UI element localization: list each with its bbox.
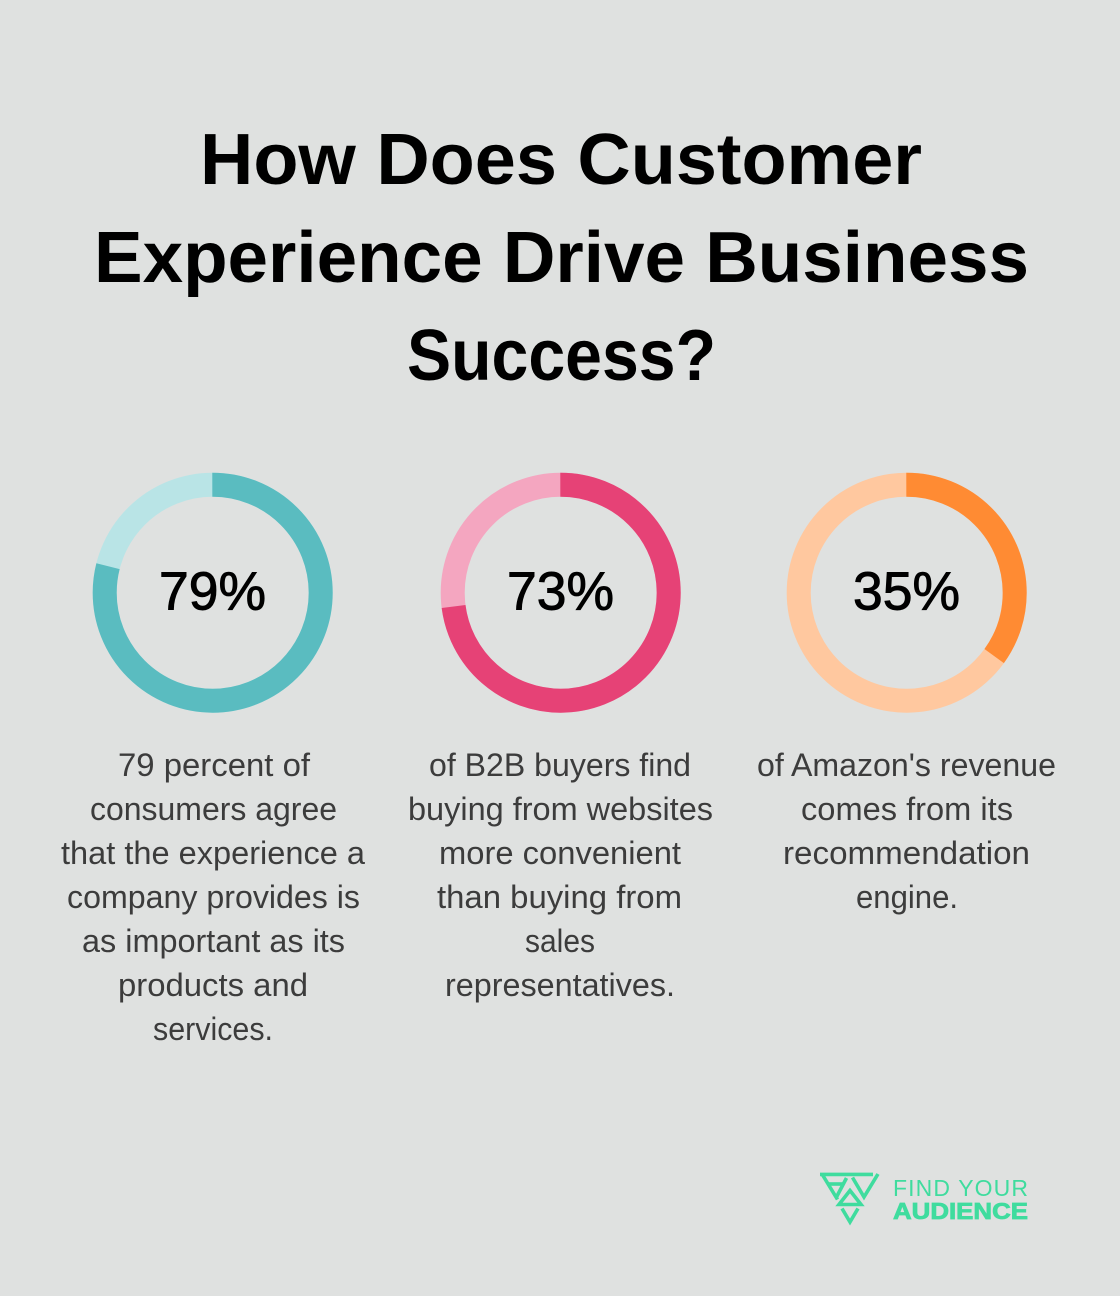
title xyxy=(94,120,1029,396)
donut chart: 79% xyxy=(105,485,321,701)
description: 35 percent: of Amazon's revenue xyxy=(757,747,1056,783)
description: 79 percent: services. xyxy=(153,1011,273,1047)
value: 79%: 79% xyxy=(159,562,266,622)
description: 35 percent: engine. xyxy=(856,879,958,915)
title: How Does Customer xyxy=(200,120,922,200)
description: 79 percent: products and xyxy=(118,967,308,1003)
description: 73 percent: of B2B buyers find xyxy=(429,747,691,783)
title: Success? xyxy=(407,316,716,396)
wordmark: AUDIENCE xyxy=(893,1198,1028,1224)
description: 79 percent: company provides is xyxy=(67,879,360,915)
wordmark xyxy=(893,1175,1028,1224)
description: 73 percent: than buying from xyxy=(437,879,682,915)
description: 73 percent: representatives. xyxy=(445,967,675,1003)
description: 73 percent: more convenient xyxy=(439,835,681,871)
description: 35 percent xyxy=(757,747,1056,915)
description: 73 percent: sales xyxy=(525,923,595,959)
wordmark: FIND YOUR xyxy=(893,1175,1028,1201)
description: 79 percent: consumers agree xyxy=(90,791,337,827)
panel: 79 percent stat xyxy=(61,485,365,1047)
description: 35 percent: recommendation xyxy=(783,835,1030,871)
panel: 35 percent stat xyxy=(757,485,1056,915)
panel: 73 percent stat xyxy=(408,485,713,1003)
description: 79 percent: 79 percent of xyxy=(118,747,310,783)
description: 35 percent: comes from its xyxy=(801,791,1013,827)
logo: Find Your Audience xyxy=(820,1174,1028,1224)
description: 73 percent: buying from websites xyxy=(408,791,713,827)
description: 79 percent: as important as its xyxy=(82,923,345,959)
icon: triangle mark xyxy=(820,1174,878,1222)
value: 35%: 35% xyxy=(853,562,960,622)
value: 73%: 73% xyxy=(507,562,614,622)
description: 73 percent xyxy=(408,747,713,1003)
donut chart: 73% xyxy=(453,485,669,701)
description: 79 percent xyxy=(61,747,365,1047)
donut chart: 35% xyxy=(799,485,1015,701)
description: 79 percent: that the experience a xyxy=(61,835,365,871)
title: Experience Drive Business xyxy=(94,218,1029,298)
